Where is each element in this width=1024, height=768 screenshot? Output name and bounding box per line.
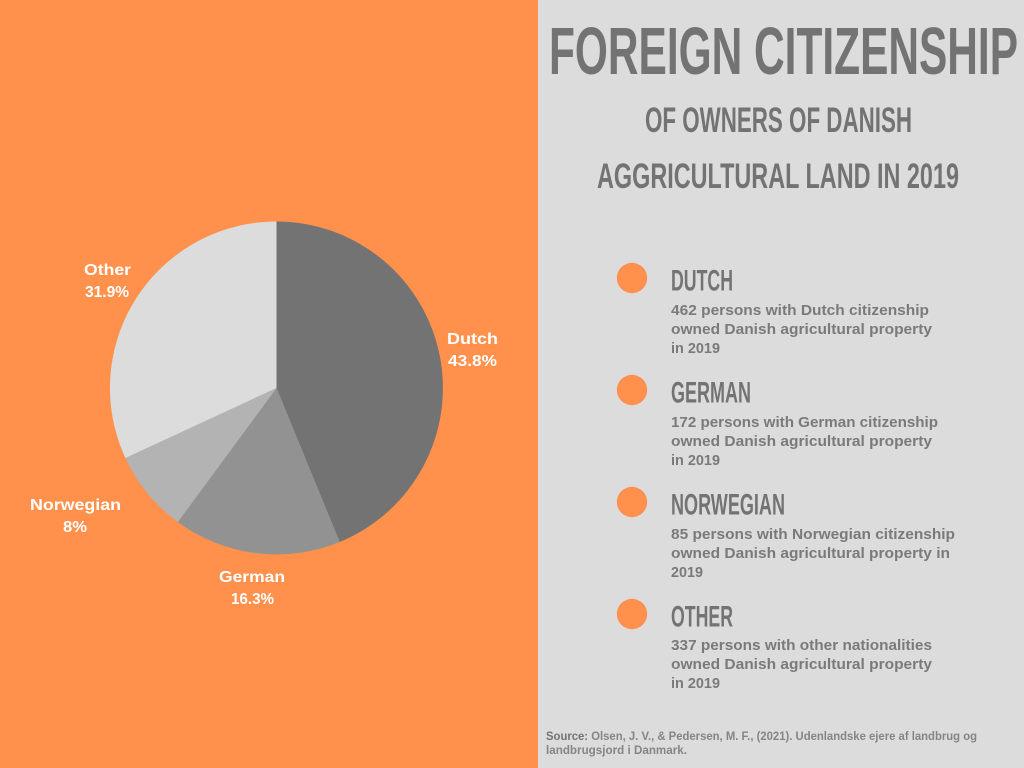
- icon: orange dot: [617, 263, 647, 293]
- pie label: Other: [84, 262, 131, 301]
- subtitle: [597, 100, 959, 196]
- legend item: Norwegian: [617, 487, 955, 581]
- legend item: Other: [617, 599, 932, 692]
- slice: Dutch: [276, 222, 443, 542]
- pie chart: [110, 222, 443, 554]
- description: Norwegian: [671, 527, 955, 581]
- slice: German: [178, 388, 340, 554]
- legend item: Dutch: [617, 263, 932, 357]
- source note: Source: Olsen, J. V., & Pedersen, M. F., (2021). Udenlandske ejere af landbrug og: [546, 731, 977, 743]
- pie label: German: 16.3%: [231, 591, 274, 608]
- description: Dutch: owned Danish agricultural property: [671, 322, 932, 338]
- heading: Other: OTHER: [671, 600, 733, 634]
- description: Norwegian: 2019: [671, 565, 703, 581]
- pie label: Dutch: Dutch: [447, 331, 498, 348]
- description: Dutch: in 2019: [671, 341, 720, 357]
- pie label: Norwegian: [30, 497, 121, 536]
- icon: orange dot: [617, 487, 647, 517]
- description: Dutch: [671, 303, 932, 357]
- heading: Dutch: DUTCH: [671, 264, 733, 298]
- description: Dutch: 462 persons with Dutch citizenship: [671, 303, 929, 319]
- description: Norwegian: owned Danish agricultural property in: [671, 546, 950, 562]
- pie label: Norwegian: 8%: [63, 519, 87, 536]
- description: Other: 337 persons with other nationalities: [671, 638, 932, 654]
- icon: orange dot: [617, 599, 647, 629]
- description: Norwegian: 85 persons with Norwegian citizenship: [671, 527, 955, 543]
- panel: orange chart background: [0, 0, 538, 768]
- pie label: Dutch: 43.8%: [448, 353, 497, 370]
- pie label: Other: 31.9%: [85, 284, 129, 301]
- pie label: German: [219, 569, 285, 608]
- description: German: [671, 415, 938, 469]
- panel: grey text background: [538, 0, 1024, 768]
- slice: Other: [110, 222, 276, 458]
- source note: landbrugsjord i Danmark.: [546, 745, 687, 757]
- pie label: Dutch: [447, 331, 498, 370]
- pie label: German: German: [219, 569, 285, 586]
- icon: orange dot: [617, 375, 647, 405]
- description: German: 172 persons with German citizenship: [671, 415, 938, 431]
- heading: Norwegian: NORWEGIAN: [671, 488, 785, 522]
- description: Other: [671, 638, 932, 692]
- description: German: in 2019: [671, 453, 720, 469]
- description: Other: owned Danish agricultural property: [671, 657, 932, 673]
- pie label: Norwegian: Norwegian: [30, 497, 121, 514]
- legend item: German: [617, 375, 938, 469]
- description: Other: in 2019: [671, 676, 720, 692]
- heading: German: GERMAN: [671, 376, 751, 410]
- slice: Norwegian: [125, 388, 277, 522]
- pie label: Other: Other: [84, 262, 131, 279]
- description: German: owned Danish agricultural property: [671, 434, 932, 450]
- source note: [546, 731, 977, 757]
